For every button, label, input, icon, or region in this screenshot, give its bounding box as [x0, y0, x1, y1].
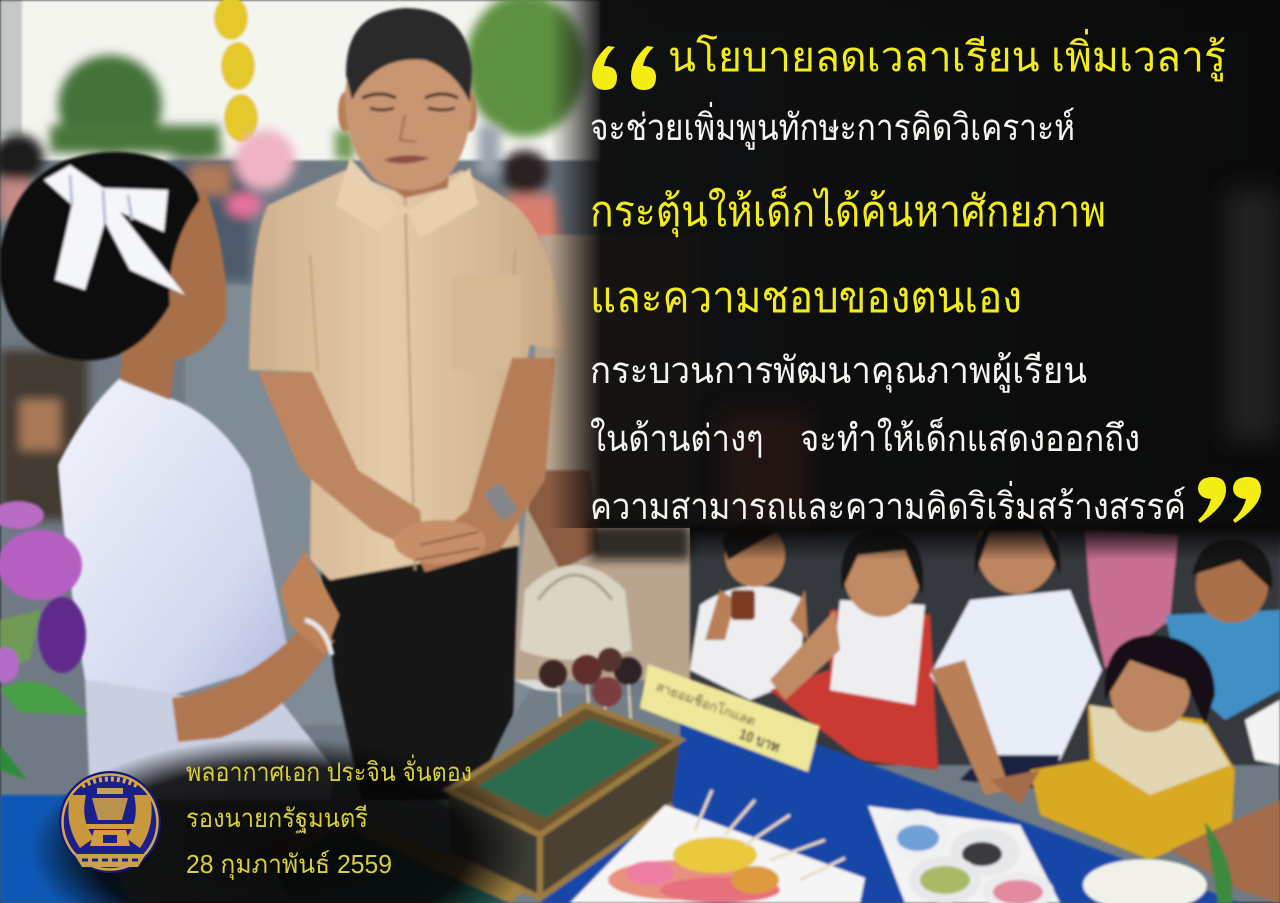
icon: cabinet seal: [59, 771, 161, 873]
back crowd: [0, 125, 561, 520]
uniform: [58, 378, 290, 695]
pole: [0, 0, 22, 135]
blue boy: [1165, 610, 1280, 720]
child 4 gold dress: [1030, 705, 1235, 860]
quote line 2: จะช่วยเพิ่มพูนทักษะการคิดวิเคราะห์: [590, 101, 1075, 150]
bottom-left table: [0, 795, 130, 903]
neck and head: [375, 150, 450, 198]
photo: blue table with sweets: สายอมช็อกโกแลต: [654, 677, 758, 729]
caption title: รองนายกรัฐมนตรี: [186, 803, 368, 834]
trousers: [320, 545, 518, 800]
photo: seated children: [690, 506, 1280, 903]
quote line 7: ความสามารถและความคิดริเริ่มสร้างสรรค์: [590, 480, 1186, 527]
white bow: [44, 165, 185, 295]
caption name: พลอากาศเอก ประจิน จั่นตอง: [186, 754, 472, 787]
child 2: [770, 610, 938, 770]
quote line 1: นโยบายลดเวลาเรียน เพิ่มเวลารู้: [668, 29, 1226, 82]
quote line 3: กระตุ้นให้เด็กได้ค้นหาศักยภาพ: [590, 186, 1106, 238]
photo: girl in uniform: [0, 152, 340, 800]
pavement: [185, 285, 585, 725]
icon: closing quotation mark: [1198, 477, 1261, 523]
yellow garland: [214, 0, 258, 142]
photo: blue table with sweets: [0, 648, 1240, 903]
wooden crate: [448, 705, 680, 898]
photo: minister: [249, 8, 565, 800]
quote line 5: กระบวนการพัฒนาคุณภาพผู้เรียน: [590, 350, 1087, 393]
white flower: [1083, 859, 1207, 903]
hair: [0, 152, 200, 360]
child 3 in uniform: [930, 590, 1102, 760]
price sign: [640, 664, 820, 772]
caption: speaker and date: [59, 754, 472, 880]
quote text: [590, 29, 1261, 527]
photo: blue table with sweets: 10 บาท: [737, 726, 782, 756]
chocolate lollipops: [539, 648, 642, 755]
second tray: [868, 806, 1060, 903]
quote line 6: ในด้านต่างๆ จะทำให้เด็กแสดงออกถึง: [590, 415, 1140, 459]
photo: flowers: [0, 501, 88, 780]
dark shade behind caption: [20, 735, 540, 903]
icon: opening quotation mark: [592, 46, 656, 90]
child 1: [690, 586, 805, 700]
caption date: 28 กุมภาพันธ์ 2559: [186, 849, 392, 880]
shirt: [249, 170, 565, 580]
balloons: [170, 130, 295, 280]
sweets tray: [570, 805, 865, 903]
quote line 4: และความชอบของตนเอง: [590, 274, 1022, 322]
woman and bag behind minister: [510, 235, 700, 680]
sky: [0, 0, 600, 160]
arms: [258, 372, 425, 555]
arm: [172, 630, 335, 742]
trees: [50, 0, 585, 160]
pink-shirt child: [1085, 530, 1178, 668]
crate rail at bottom left: [265, 805, 525, 903]
face: [120, 190, 227, 400]
dark panel behind quote: [550, 0, 1280, 560]
